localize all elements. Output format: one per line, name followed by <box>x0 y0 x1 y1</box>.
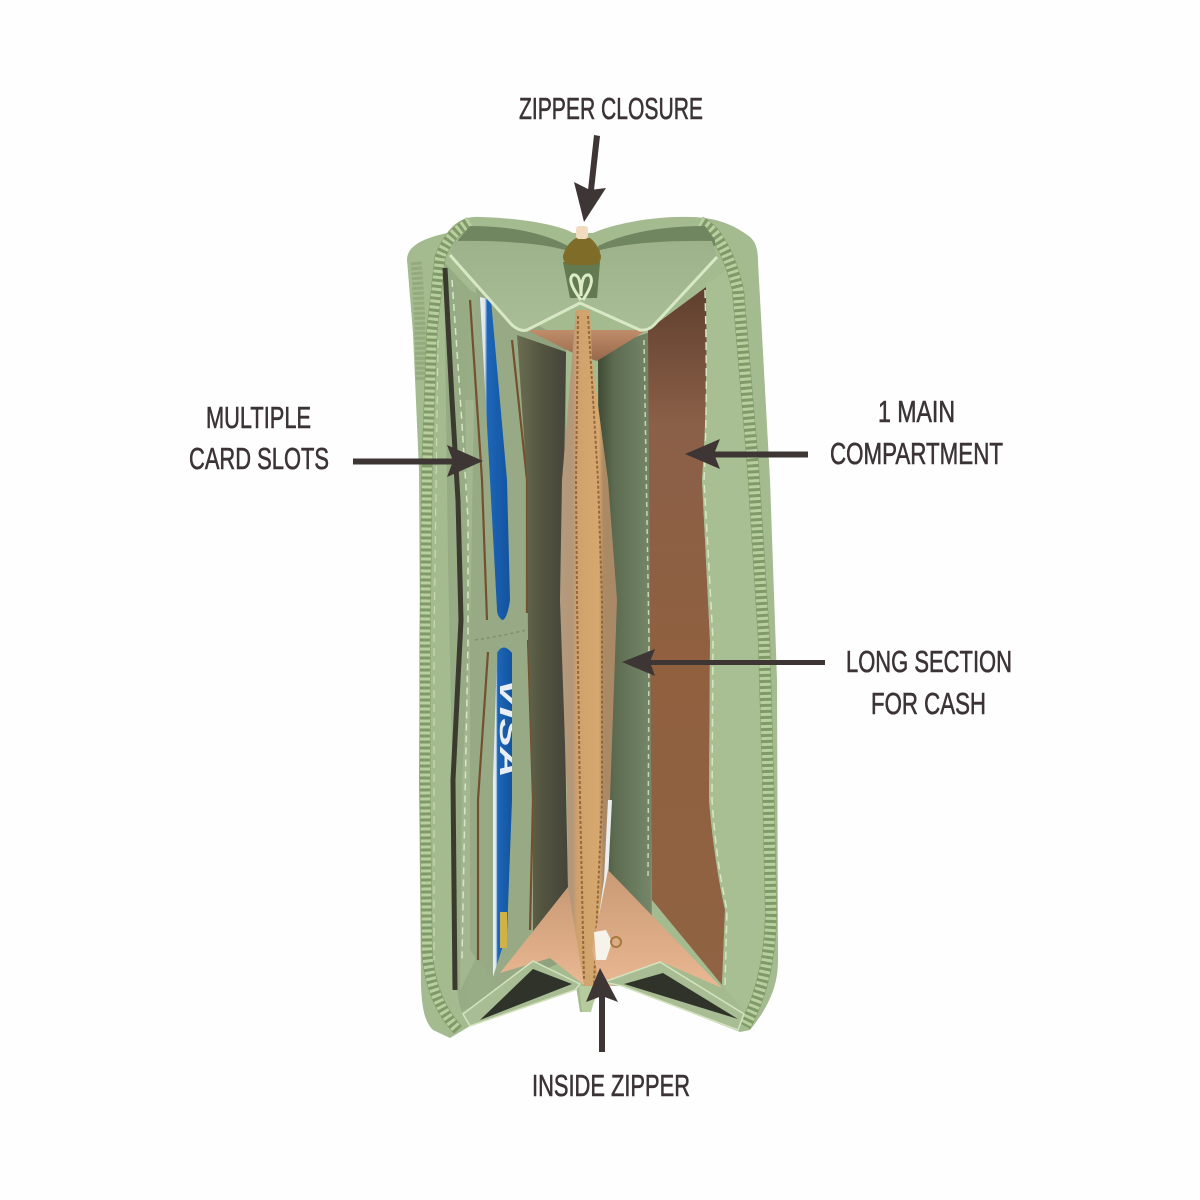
left stitching <box>452 280 468 960</box>
label: long section for cash: FOR CASH <box>871 686 986 721</box>
card slot pocket <box>470 285 536 985</box>
wallet outer body <box>407 217 778 1038</box>
top zipper tape <box>458 226 715 262</box>
inside zipper ring <box>611 937 621 947</box>
upper blue card <box>480 297 510 620</box>
bottom dark openings <box>480 969 572 1020</box>
outer zipper pull brass <box>563 238 601 265</box>
pocket seam <box>475 617 648 640</box>
arrow: long section for cash <box>622 649 825 676</box>
inner lining panels <box>444 262 566 1012</box>
label: main compartment <box>830 394 1003 471</box>
right dark green pocket <box>598 332 652 990</box>
label: multiple card slots: CARD SLOTS <box>189 441 329 476</box>
label: main compartment: 1 MAIN <box>878 394 955 429</box>
receipt edge <box>598 800 610 935</box>
label: main compartment: COMPARTMENT <box>830 436 1003 471</box>
label: long section for cash <box>846 644 1012 721</box>
outer left zipper tape <box>416 262 421 380</box>
central inner zipper gusset <box>560 310 617 1000</box>
right zipper teeth <box>700 222 771 1026</box>
green centre tape <box>563 262 600 298</box>
top peach gussets <box>527 330 647 361</box>
top green flaps <box>450 241 580 330</box>
bottom peach gussets <box>500 887 584 985</box>
slot stitching <box>470 300 533 960</box>
zipper stop top <box>576 226 588 239</box>
VISA mark on card: VISA <box>494 678 524 778</box>
dark left pocket interior <box>517 335 568 950</box>
lower blue card <box>493 648 512 977</box>
label: multiple card slots: MULTIPLE <box>206 400 311 435</box>
dark gap beside left zipper <box>445 268 461 990</box>
arrow: zipper closure <box>574 135 606 222</box>
inside zipper pull <box>594 930 612 960</box>
label: inside zipper: INSIDE ZIPPER <box>532 1068 690 1103</box>
panel light strip <box>460 400 480 990</box>
card yellow strip <box>500 912 507 948</box>
label: long section for cash: LONG SECTION <box>846 644 1012 679</box>
left zipper teeth <box>425 222 470 1030</box>
right panel stitching <box>704 290 727 985</box>
arrow: main compartment <box>685 439 808 469</box>
right panel <box>702 270 768 1012</box>
wallet photo illustration <box>407 217 778 1038</box>
inner zipper teeth <box>576 316 584 980</box>
bottom green flaps <box>463 961 580 1026</box>
flap stitched edge <box>450 255 717 330</box>
bottom zipper tip <box>579 986 598 1012</box>
brown main compartment <box>648 287 725 985</box>
label: multiple card slots <box>189 400 329 476</box>
arrow: inside zipper <box>586 968 618 1052</box>
label: zipper closure: ZIPPER CLOSURE <box>519 91 703 126</box>
arrow: multiple card slots <box>353 445 483 477</box>
inner zipper top stitched loop <box>571 275 591 300</box>
